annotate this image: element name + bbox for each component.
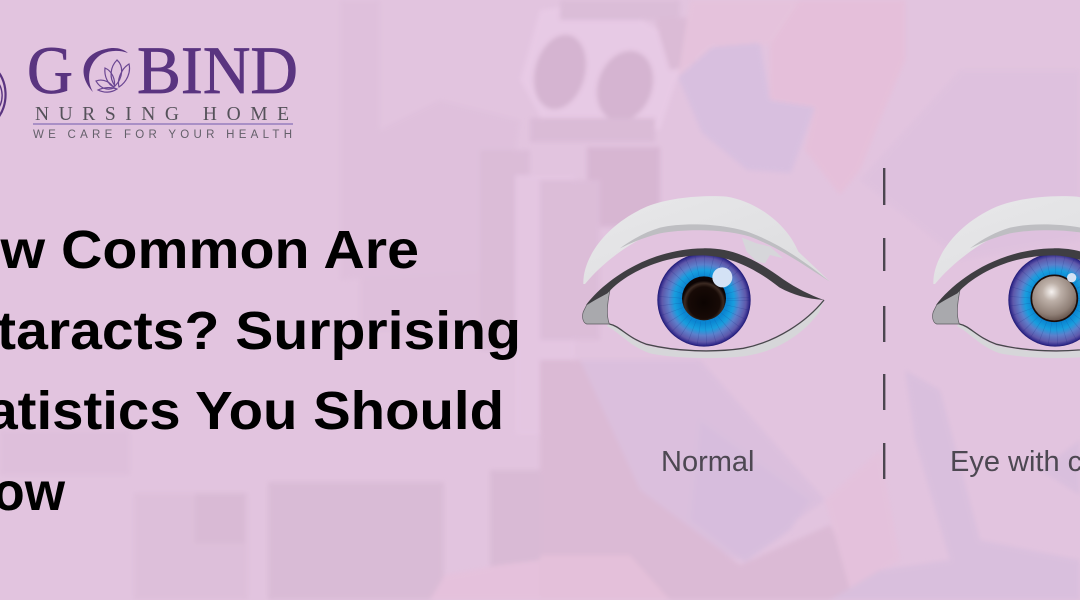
logo emblem arcs clipped at left edge — [0, 68, 6, 120]
logo lotus in O — [84, 48, 130, 92]
logo subtitle: NURSING HOME — [35, 104, 289, 125]
logo wordmark BIND: BIND — [137, 32, 298, 108]
icon: normal eye — [583, 196, 830, 358]
logo underline — [33, 123, 293, 125]
logo wordmark G: G — [27, 32, 73, 108]
title — [0, 220, 521, 522]
icon: eye with cataract — [933, 196, 1080, 358]
logo — [0, 32, 298, 141]
logo tagline: WE CARE FOR YOUR HEALTH — [33, 129, 292, 141]
label: Normal: Normal — [661, 446, 754, 478]
dashed divider — [883, 168, 885, 479]
